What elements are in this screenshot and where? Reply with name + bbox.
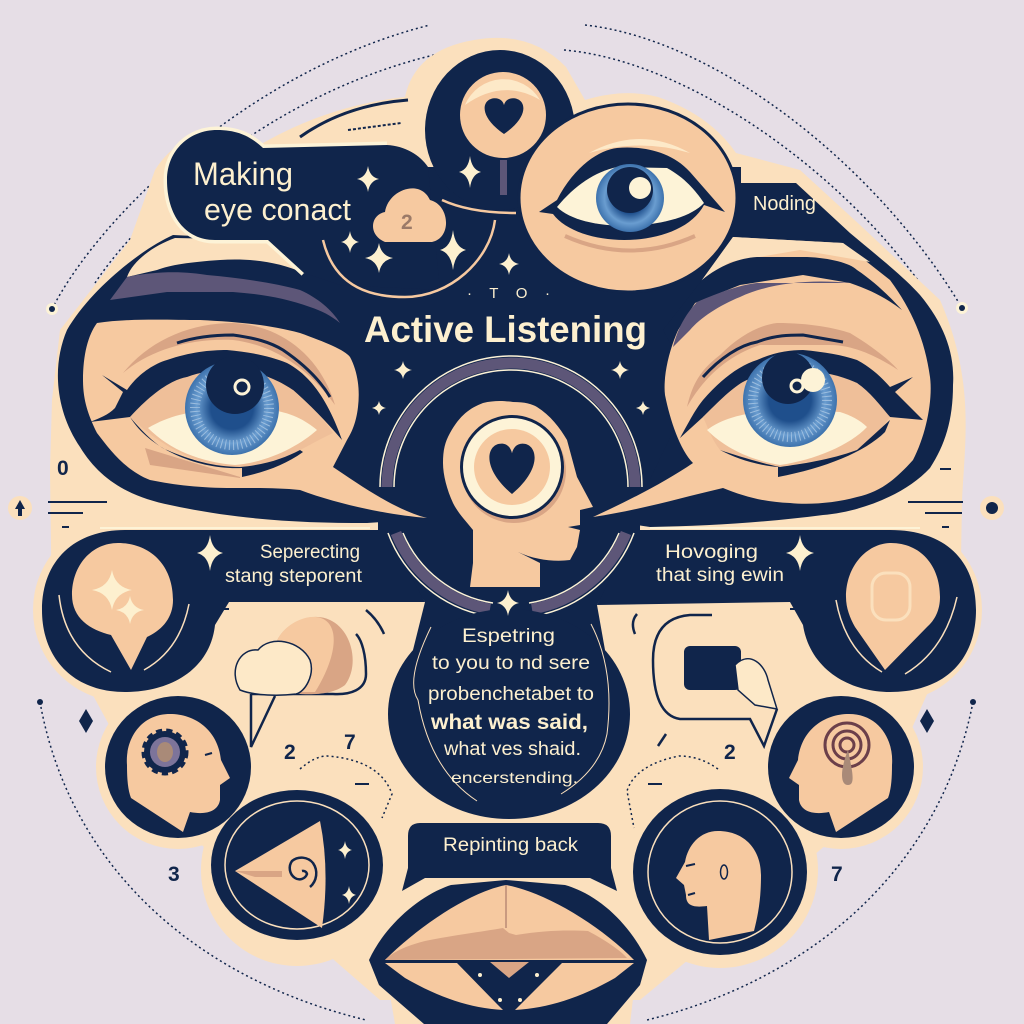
left speech band: Seperecting [260, 542, 360, 563]
top navy circle with heart pin [425, 50, 575, 213]
central text circle: to you to nd sere [432, 653, 590, 674]
right speech band: that sing ewin [656, 565, 784, 586]
numbers: 0 [57, 457, 69, 480]
central text circle [388, 590, 630, 819]
title: Active Listening [364, 309, 647, 350]
left speech band: stang steporent [225, 566, 363, 587]
cloud icon with number 2: 2 [401, 211, 413, 234]
right head circle with ear waves [768, 696, 914, 838]
numbers [57, 457, 843, 886]
nodding label: Noding [753, 193, 816, 215]
small hairline marks [366, 610, 666, 746]
central text circle: probenchetabet to [428, 684, 594, 705]
central text circle: encerstending. [451, 770, 578, 787]
repeating back label: Repinting back [443, 835, 579, 856]
numbers: 2 [284, 741, 296, 764]
dashed connectors [300, 756, 718, 828]
lower left circle with spiral [211, 790, 383, 940]
phone in hand speech bubble [653, 615, 777, 746]
repeating back label [402, 823, 617, 891]
speech bubble: making eye contact: Making [193, 156, 293, 192]
central text circle: Espetring [462, 626, 555, 647]
sparkles [341, 166, 650, 415]
top eye [519, 104, 737, 292]
cloud icon with number 2 [323, 188, 495, 297]
central text circle: what ves shaid. [443, 739, 581, 760]
center head with heart [443, 401, 593, 587]
cloud speech bubble [235, 617, 366, 747]
right eye [593, 237, 931, 517]
right speech band: Hovoging [665, 542, 758, 563]
numbers: 3 [168, 863, 180, 886]
central navy body [340, 167, 741, 650]
left eye [83, 238, 427, 518]
right speech band [597, 527, 976, 692]
left head circle with gear [105, 696, 251, 838]
ring around head [380, 356, 642, 616]
left eye navy surround [58, 235, 440, 523]
speech bubble: making eye contact: eye conact [204, 192, 351, 227]
central text circle: what was said, [430, 711, 588, 734]
decorative top lines [300, 100, 408, 137]
speech bubble: making eye contact [167, 130, 440, 290]
subtitle to: · T O · [467, 285, 550, 302]
small markers [37, 302, 976, 785]
lower right circle with profile [633, 789, 807, 955]
numbers: 2 [724, 741, 736, 764]
lips [369, 880, 647, 1024]
side icons [8, 496, 1004, 520]
left speech band [42, 527, 425, 692]
numbers: 7 [344, 731, 356, 754]
right eye navy surround [590, 183, 953, 527]
numbers: 7 [831, 863, 843, 886]
